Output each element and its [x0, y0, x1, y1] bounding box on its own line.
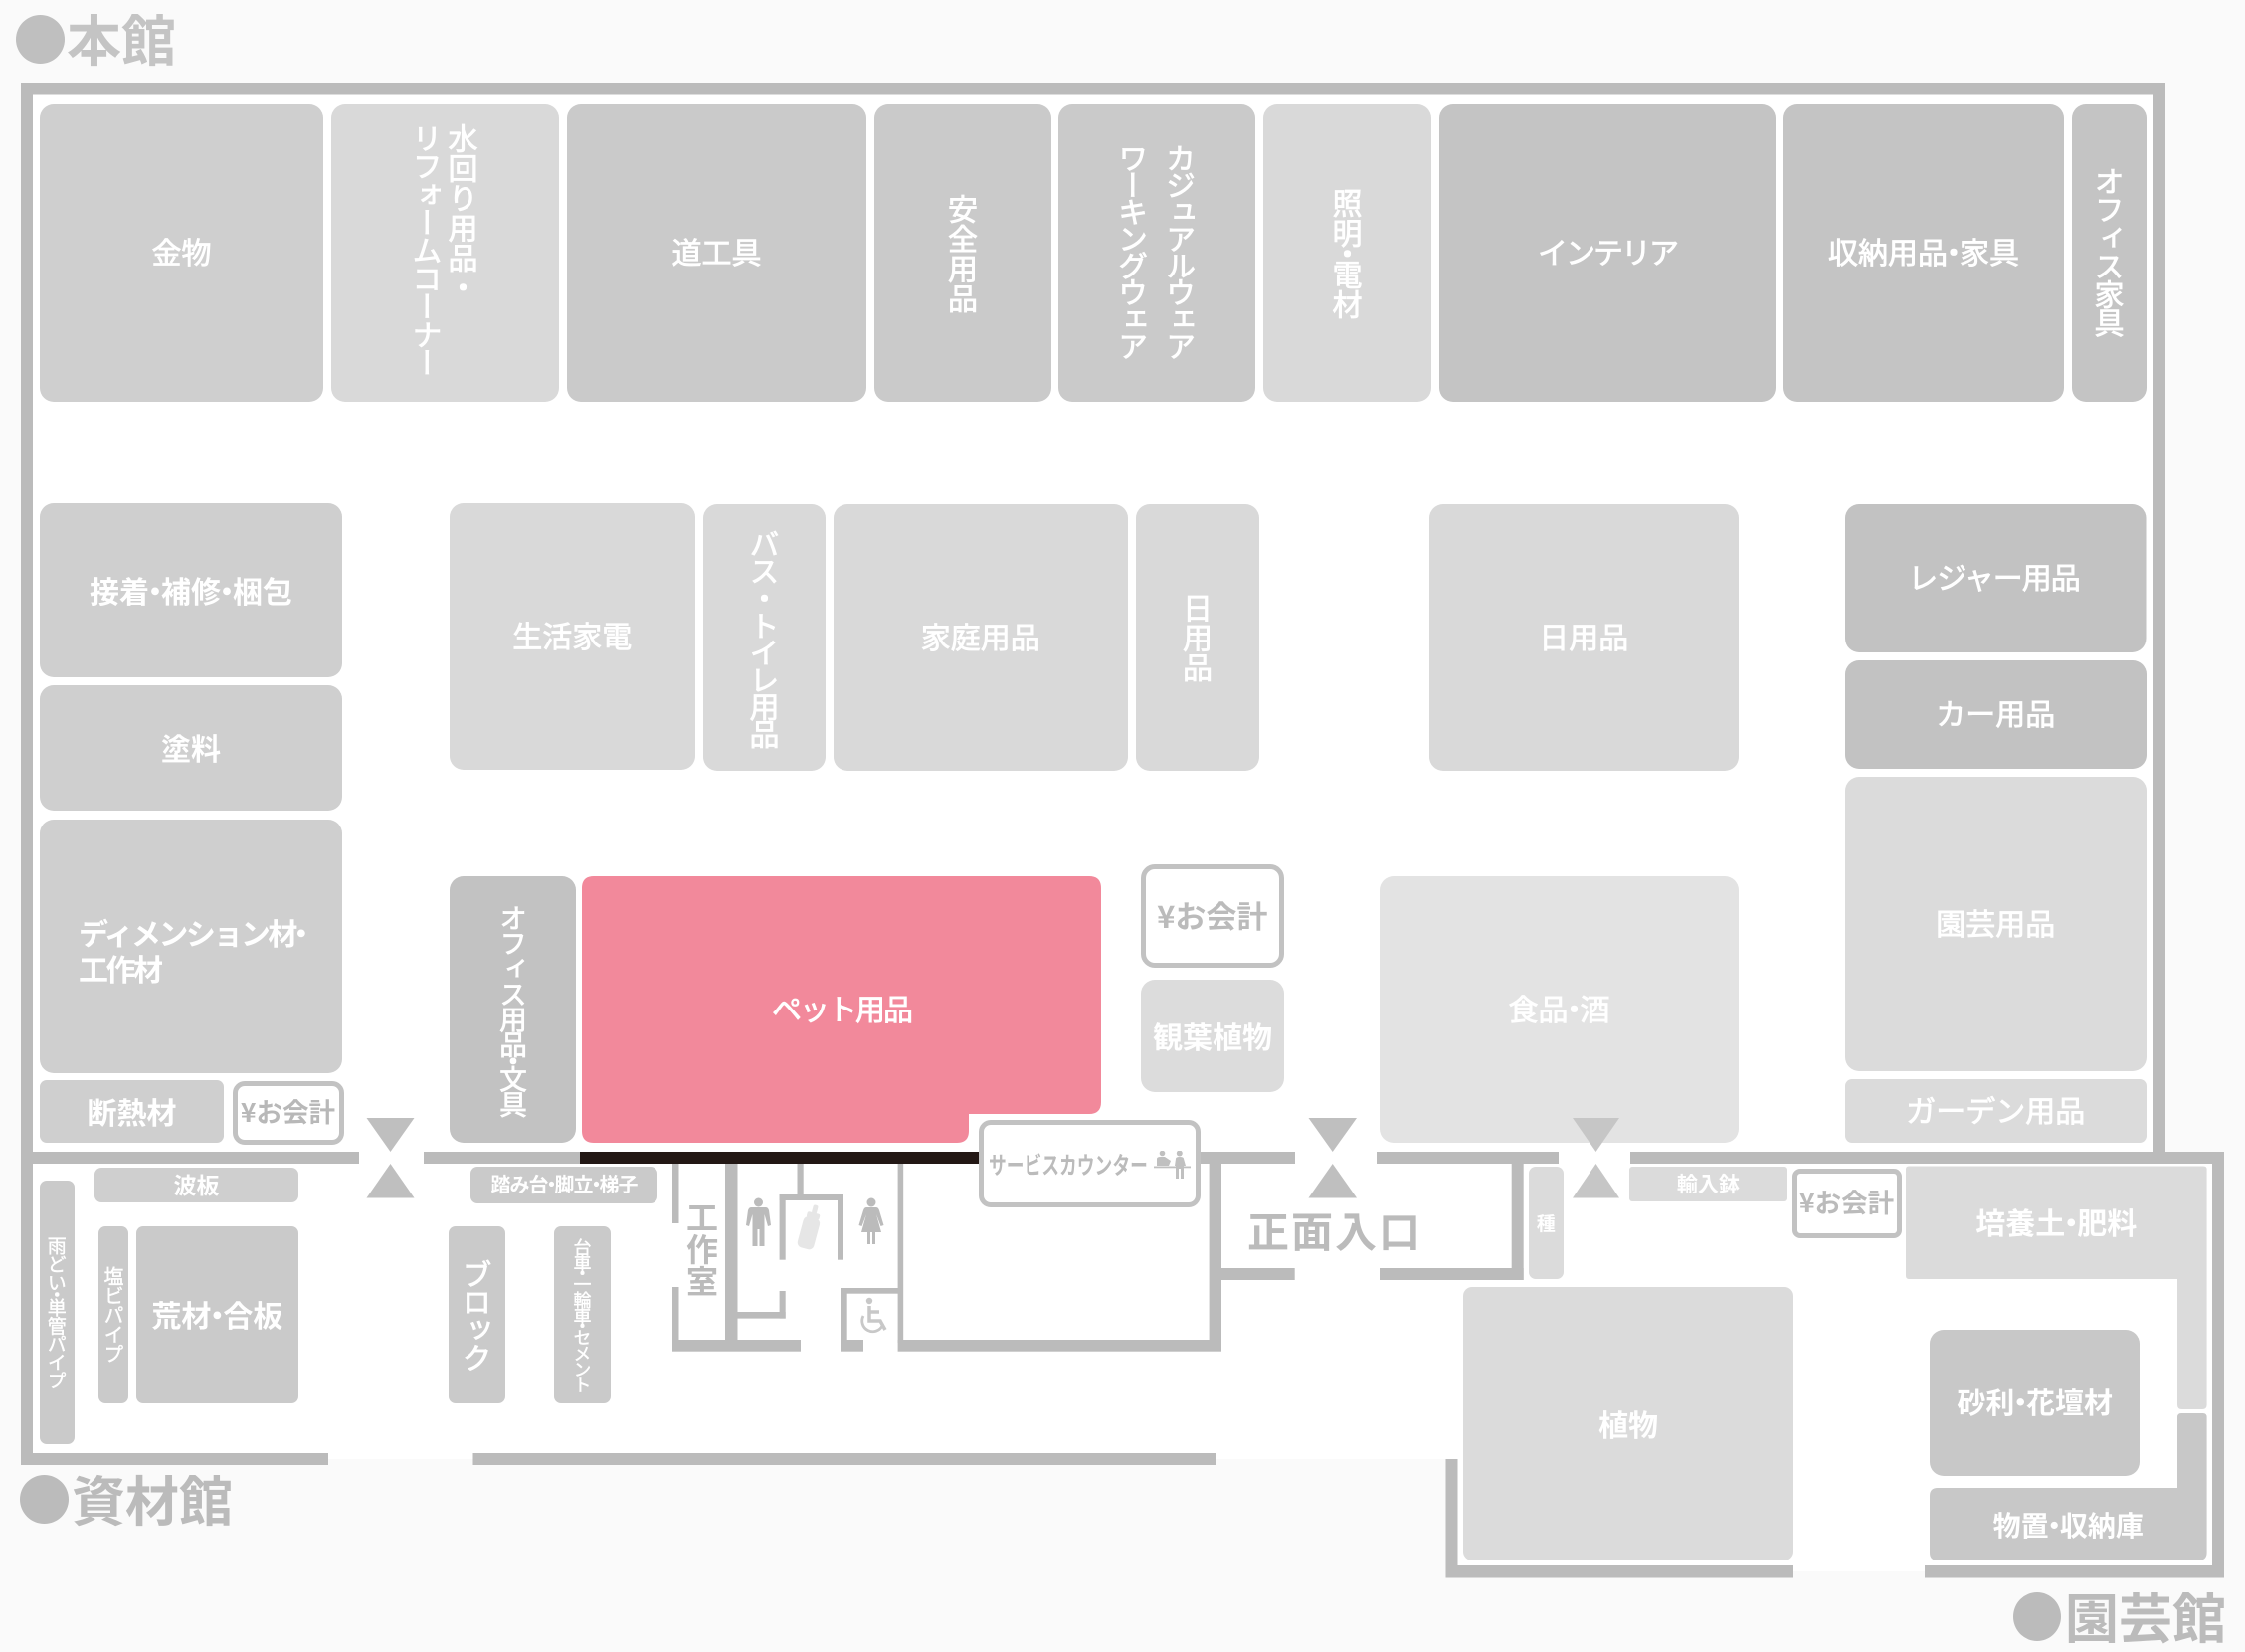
icon: men's restroom [746, 1197, 771, 1246]
store section: insulation: 断熱材 [88, 1088, 177, 1132]
store section: storage and furniture [1783, 104, 2064, 402]
store section: lighting and electrical [1263, 104, 1431, 402]
label: main entrance: 正面入口 [1247, 1199, 1422, 1260]
store section: PVC pipes: 塩ビパイプ [99, 1266, 128, 1363]
icon: service staff [1154, 1151, 1191, 1179]
store section: step stools and ladders: 踏み台・脚立・梯子 [491, 1169, 637, 1197]
store section: safety goods [874, 104, 1051, 402]
checkout: main building left [233, 1081, 344, 1145]
store section: foliage plants [1141, 980, 1284, 1092]
store section: hardware [40, 104, 323, 402]
store section: hardware: 金物 [151, 229, 211, 273]
store section: bath and toilet goods: バス・トイレ用品 [742, 529, 786, 746]
store section: rain gutters and pipes [40, 1181, 75, 1444]
store section: paint [40, 685, 342, 811]
store section: food and liquor: 食品・酒 [1508, 985, 1609, 1028]
store section: PVC pipes [98, 1226, 128, 1402]
heading: materials building: 資材館 [72, 1458, 233, 1537]
checkout: center [1141, 864, 1283, 968]
icon: wheelchair [862, 1298, 885, 1332]
store section: plants: 植物 [1598, 1400, 1658, 1444]
checkout: garden: ¥お会計 [1799, 1182, 1894, 1220]
entrance arrows: left [366, 1118, 414, 1197]
service counter label: サービスカウンター [989, 1146, 1148, 1181]
checkout: garden [1792, 1169, 1902, 1238]
store section: adhesives, repair, packing: 接着・補修・梱包 [90, 567, 292, 611]
store section: food and liquor [1380, 876, 1739, 1143]
store section: daily goods narrow [1136, 504, 1259, 771]
store section: carts, wheelbarrows, cement: 台車・一輪車・セメント [569, 1238, 595, 1391]
heading: main building [16, 0, 176, 77]
store section: step stools and ladders [470, 1166, 657, 1203]
store section: imported pots [1629, 1166, 1787, 1201]
store section: gardening goods: 園芸用品 [1936, 899, 2055, 943]
store section: dimension lumber and craft materials: 工作材 [79, 946, 161, 990]
store section: office furniture: オフィス家具 [2087, 166, 2131, 336]
store section: blocks: ブロック [456, 1259, 499, 1371]
black wall section [580, 1152, 988, 1164]
store section: home appliances [450, 503, 694, 770]
store section: paint: 塗料 [161, 725, 221, 769]
store section: foliage plants: 観葉植物 [1153, 1012, 1272, 1056]
store section: seeds [1529, 1166, 1564, 1279]
store section: raw lumber and plywood: 荒材・合板 [151, 1292, 282, 1336]
store section: imported pots: 輸入鉢 [1677, 1168, 1740, 1197]
store section: corrugated sheets [94, 1168, 298, 1202]
store section: plants [1463, 1287, 1793, 1560]
store section: household goods [834, 504, 1128, 771]
pet supplies highlighted area [582, 876, 1101, 1143]
store section: office supplies and stationery: オフィス用品・文具 [493, 903, 533, 1116]
store section: casual and work wear: ワーキングウェア [1111, 143, 1155, 358]
soil and fertilizer area shape [1906, 1166, 2207, 1409]
store section: dimension lumber and craft materials [40, 820, 342, 1073]
store section: seeds: 種 [1537, 1209, 1556, 1236]
store section: bath and toilet goods [703, 504, 826, 771]
label: sheds and storage: 物置・収納庫 [1993, 1504, 2144, 1544]
store section: leisure goods: レジャー用品 [1908, 554, 2080, 598]
store section: daily goods: 日用品 [1539, 613, 1628, 656]
store section: gardening goods [1845, 777, 2147, 1071]
store section: daily goods narrow: 日用品 [1176, 593, 1219, 682]
checkout: main building left: ¥お会計 [241, 1091, 335, 1130]
store section: interior: インテリア [1538, 229, 1677, 273]
label: pet supplies: ペット用品 [772, 985, 911, 1028]
store section: gravel and flower bed materials: 砂利・花壇材 [1957, 1380, 2113, 1422]
store section: home appliances: 生活家電 [512, 613, 632, 656]
store section: casual and work wear [1058, 104, 1255, 402]
store section: car goods [1845, 660, 2147, 768]
store section: office furniture [2072, 104, 2147, 402]
label: workshop: 工作室 [679, 1201, 725, 1297]
store section: corrugated sheets: 波板 [173, 1167, 219, 1200]
store section: tools: 道工具 [672, 229, 762, 273]
store section: water fixtures and remodel corner [331, 104, 559, 402]
store section: raw lumber and plywood [136, 1226, 298, 1402]
store section: office supplies and stationery [450, 876, 575, 1143]
label: potting soil and fertilizer: 培養土・肥料 [1975, 1199, 2137, 1243]
entrance arrows: main entrance [1309, 1118, 1357, 1197]
store section: carts, wheelbarrows, cement [554, 1226, 611, 1402]
store section: storage and furniture: 収納用品・家具 [1828, 229, 2019, 273]
store section: garden goods: ガーデン用品 [1906, 1086, 2085, 1130]
store section: water fixtures and remodel corner: 水回り用品・ [442, 123, 485, 302]
store section: casual and work wear: カジュアルウェア [1159, 143, 1203, 358]
store section: blocks [449, 1226, 505, 1402]
heading: garden building: 園芸館 [2065, 1575, 2226, 1652]
store section: car goods: カー用品 [1936, 690, 2055, 734]
icon: women's restroom [859, 1197, 883, 1244]
store section: insulation [40, 1080, 224, 1143]
store section: lighting and electrical: 照明・電材 [1325, 187, 1369, 318]
store section: rain gutters and pipes: 雨どい・単管パイプ [44, 1236, 71, 1388]
store section: daily goods [1428, 504, 1739, 771]
store section: tools [567, 104, 866, 402]
store section: adhesives, repair, packing [40, 503, 342, 677]
store section: dimension lumber and craft materials: ディメンション材・ [79, 910, 313, 954]
icon: baby bottle [797, 1203, 825, 1250]
store section: gravel and flower bed materials [1930, 1330, 2140, 1476]
store section: safety goods: 安全用品 [941, 193, 985, 312]
store section: interior [1439, 104, 1776, 402]
service counter [979, 1120, 1201, 1207]
store section: leisure goods [1845, 504, 2143, 652]
checkout: center: ¥お会計 [1157, 892, 1267, 937]
store section: water fixtures and remodel corner: リフォームコーナー [406, 123, 450, 376]
store section: garden goods [1845, 1079, 2147, 1143]
shed and storage area shape [1930, 1413, 2207, 1560]
store section: household goods: 家庭用品 [921, 613, 1040, 656]
